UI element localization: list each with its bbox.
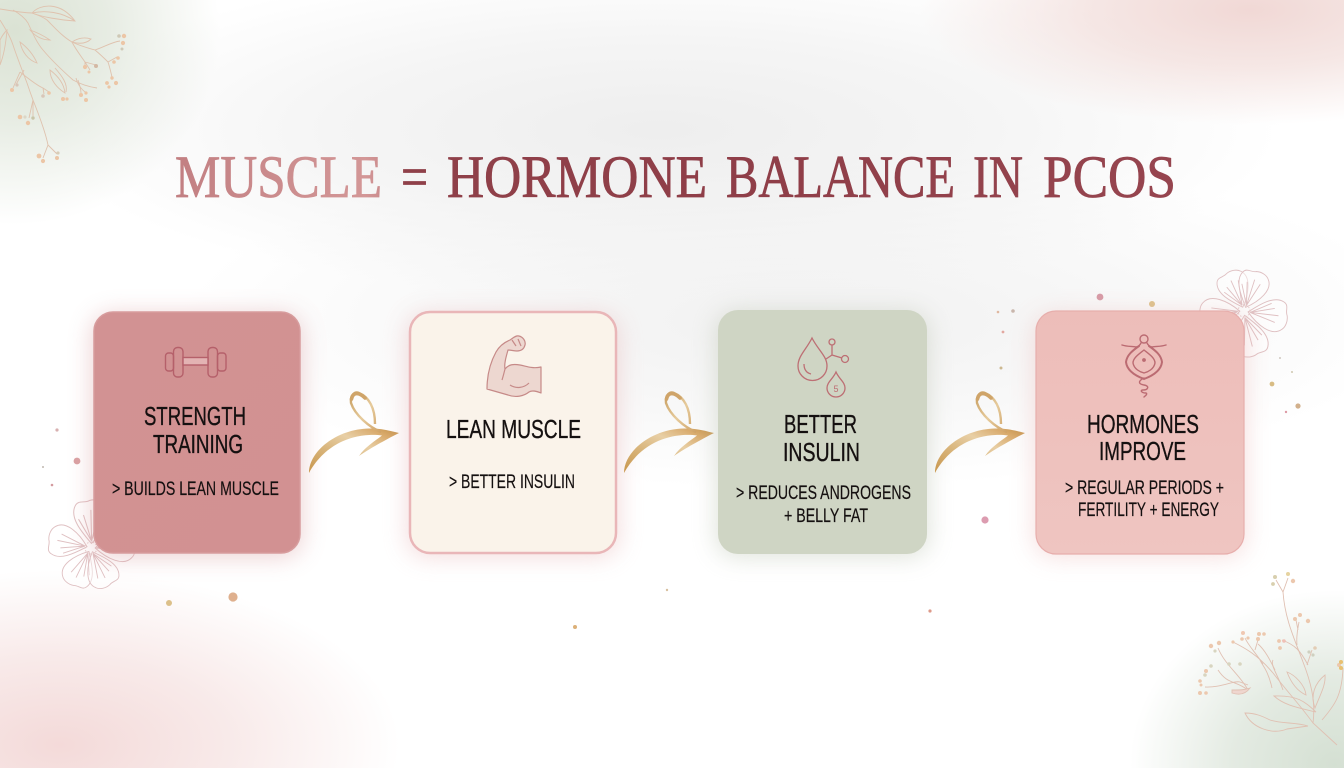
flower bottom left — [44, 498, 135, 593]
heading: better insulin — [783, 409, 860, 467]
heading: hormones improve: IMPROVE — [1099, 436, 1186, 466]
text: reduces androgens: > REDUCES ANDROGENS — [736, 482, 911, 504]
icon: flexed arm — [487, 336, 541, 396]
text: regular periods — [1065, 477, 1224, 521]
text: better insulin: > BETTER INSULIN — [449, 471, 575, 493]
title: HORMONE — [447, 144, 707, 211]
icon: dumbbell — [166, 348, 226, 377]
text: regular periods: > REGULAR PERIODS + — [1065, 477, 1224, 499]
card: better insulin — [716, 310, 929, 557]
arrow 3 — [935, 392, 1025, 473]
title: = — [401, 144, 428, 211]
floral branch bottom right — [1198, 572, 1343, 745]
title — [175, 144, 1176, 211]
title: PCOS — [1043, 144, 1176, 211]
text: reduces androgens: + BELLY FAT — [784, 505, 868, 527]
title: BALANCE — [726, 144, 955, 211]
flower top right — [1199, 265, 1291, 359]
arrow 1 — [309, 392, 399, 473]
icon: hormone symbol — [1122, 335, 1166, 397]
floral branch top left — [0, 6, 126, 163]
text: builds lean muscle: > BUILDS LEAN MUSCLE — [112, 478, 279, 500]
heading: hormones improve: HORMONES — [1087, 409, 1199, 439]
icon: insulin drops — [798, 338, 848, 397]
card: hormones improve — [1034, 311, 1246, 557]
icon: insulin drops: 5 — [833, 384, 839, 394]
text: reduces androgens — [736, 482, 911, 527]
heading: strength training — [144, 401, 246, 459]
title: MUSCLE — [175, 144, 382, 211]
heading: hormones improve — [1087, 409, 1199, 466]
heading: strength training: TRAINING — [153, 429, 243, 459]
heading: lean muscle: LEAN MUSCLE — [446, 414, 581, 444]
card: lean muscle — [407, 312, 619, 557]
heading: strength training: STRENGTH — [144, 401, 246, 431]
arrow 2 — [624, 392, 714, 473]
scattered dots — [42, 294, 1301, 629]
text: regular periods: FERTILITY + ENERGY — [1078, 499, 1219, 521]
title: IN — [973, 144, 1023, 211]
heading: better insulin: INSULIN — [783, 437, 860, 467]
heading: better insulin: BETTER — [784, 409, 857, 439]
card: strength training — [92, 312, 302, 557]
